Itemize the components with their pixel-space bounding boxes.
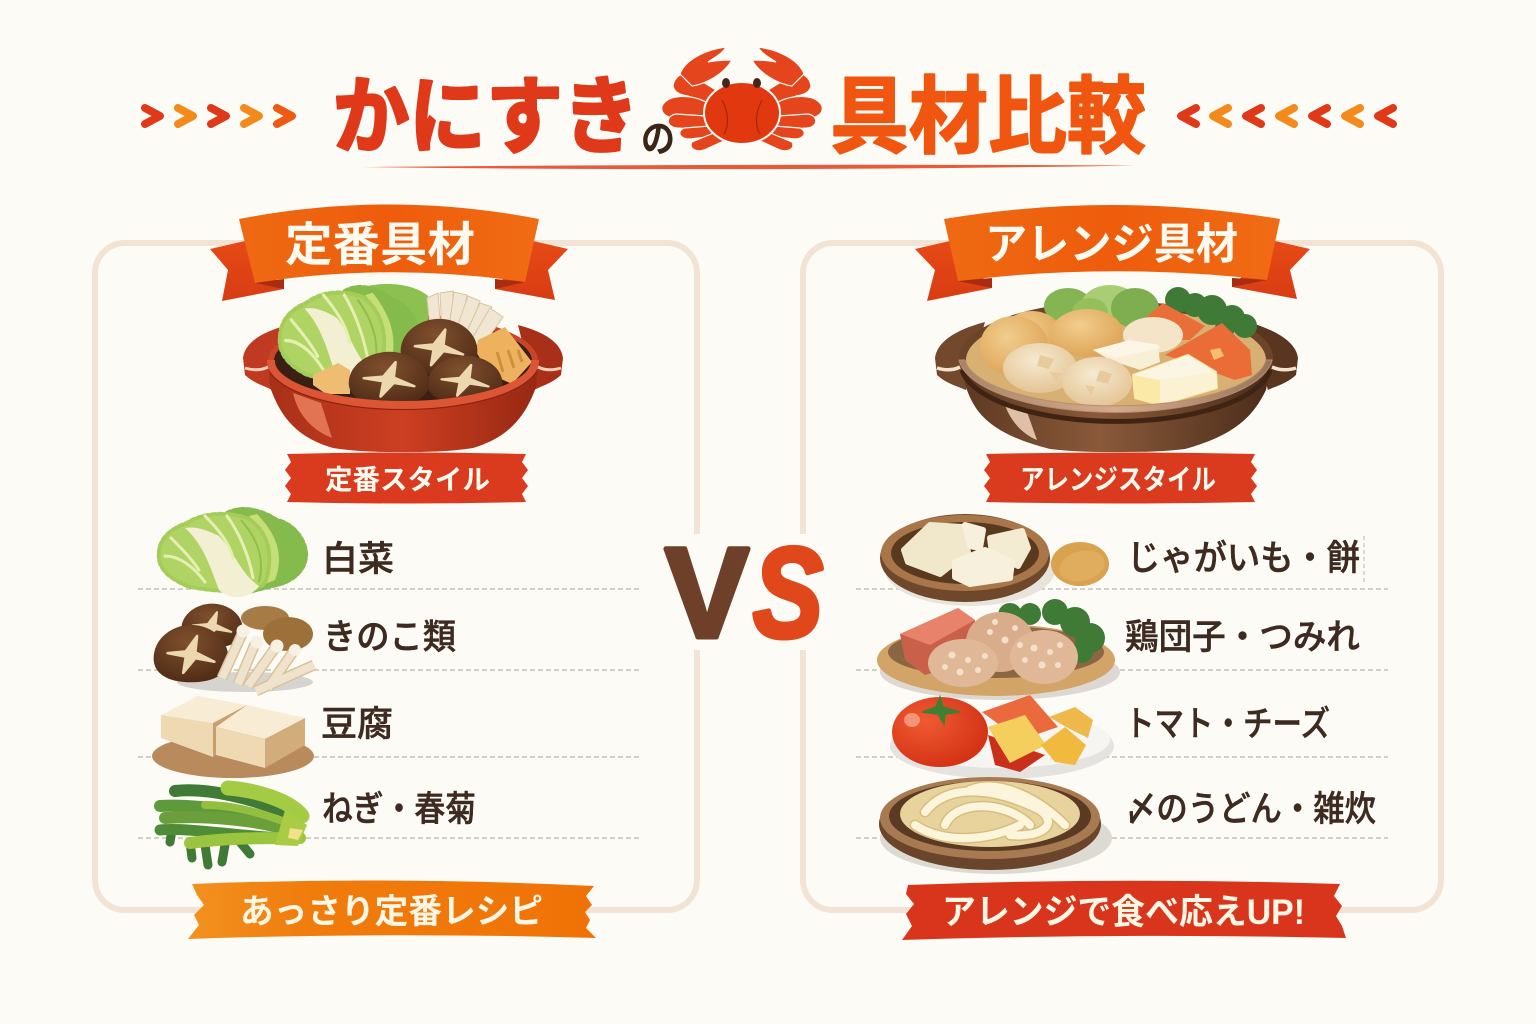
pot: arranged style hotpot: [935, 285, 1298, 452]
item: tomato and cheese: [890, 695, 1330, 779]
VS emblem: S: [753, 522, 823, 665]
title underline: [362, 165, 1136, 169]
footer banner: arranged: [902, 881, 1346, 940]
ingredient: meatball centre: [1062, 357, 1132, 407]
list: arranged ingredients: [877, 514, 1376, 874]
ingredient: shiitake right: [428, 356, 502, 404]
VS emblem: V: [665, 522, 749, 665]
ingredient: tofu small: [1093, 340, 1160, 370]
item: scallion and chrysanthemum: ねぎ・春菊: [322, 790, 476, 829]
title: kanisuki: かにすき: [333, 70, 639, 164]
ingredient: lettuce: [1044, 285, 1159, 328]
ingredient: back leaf: [345, 284, 428, 345]
heading ribbon: classic: [210, 204, 568, 301]
sub-banner: arranged style: アレンジスタイル: [1020, 464, 1216, 495]
sub-banner: classic style: [285, 452, 528, 504]
panel: arranged ingredients frame: [803, 243, 1441, 910]
ingredient: dark greens: [1165, 287, 1257, 338]
heading ribbon: classic: 定番具材: [285, 218, 475, 271]
title row: [145, 47, 1393, 169]
ingredient: potatoes: [980, 309, 1123, 376]
item: mushrooms: [154, 604, 456, 692]
icon: crab: [662, 47, 822, 151]
ingredient: meatball left: [1003, 343, 1077, 393]
item: tofu on board: 豆腐: [321, 705, 393, 744]
ingredient: carrot back: [1140, 303, 1205, 340]
chevrons right: [1181, 108, 1393, 124]
list: classic ingredients: [152, 509, 476, 865]
pot body front: [959, 360, 1272, 452]
footer banner: classic: [188, 880, 596, 939]
item: udon and zosui: [879, 777, 1376, 874]
heading ribbon: arranged: アレンジ具材: [985, 221, 1238, 269]
item: napa cabbage: [159, 509, 394, 597]
ingredient: fried tofu: [476, 327, 532, 384]
item: mushrooms: きのこ類: [323, 618, 456, 657]
title: ingredient comparison: 具材比較: [830, 70, 1146, 164]
item: tofu on board: [152, 696, 393, 778]
ingredient: eringi bundle: [427, 291, 503, 347]
pot: classic style hotpot: [243, 284, 563, 452]
footer banner: classic: あっさり定番レシピ: [240, 893, 543, 931]
ingredient: shiitake back: [401, 319, 477, 374]
sub-banner: arranged style: [984, 452, 1257, 504]
ingredient: shiitake left: [349, 352, 429, 405]
VS emblem: [665, 522, 823, 665]
item: tomato and cheese: トマト・チーズ: [1125, 705, 1330, 744]
heading ribbon: arranged: [915, 205, 1310, 301]
item: chicken meatballs: 鶏団子・つみれ: [1125, 618, 1360, 657]
panel: classic ingredients frame: [95, 243, 697, 910]
pot body front: [268, 361, 538, 452]
ingredient: napa cabbage: [280, 287, 419, 387]
item: potato and mochi: [880, 514, 1364, 606]
sub-banner: classic style: 定番スタイル: [325, 464, 490, 495]
footer banner: arranged: アレンジで食べ応えUP!: [942, 893, 1305, 932]
item: scallion and chrysanthemum: [160, 788, 476, 865]
ingredient: carrot front: [1165, 323, 1252, 380]
item: chicken meatballs: [877, 599, 1360, 700]
ingredient: tofu cube: [313, 363, 350, 394]
ingredient: tofu large: [1133, 355, 1217, 405]
chevrons left: [145, 108, 292, 124]
title: particle no: の: [641, 119, 675, 161]
item: napa cabbage: 白菜: [322, 540, 394, 579]
item: potato and mochi: じゃがいも・餅: [1127, 539, 1360, 578]
item: udon and zosui: 〆のうどん・雑炊: [1125, 790, 1376, 829]
ingredient: fish cake: [1123, 317, 1183, 353]
